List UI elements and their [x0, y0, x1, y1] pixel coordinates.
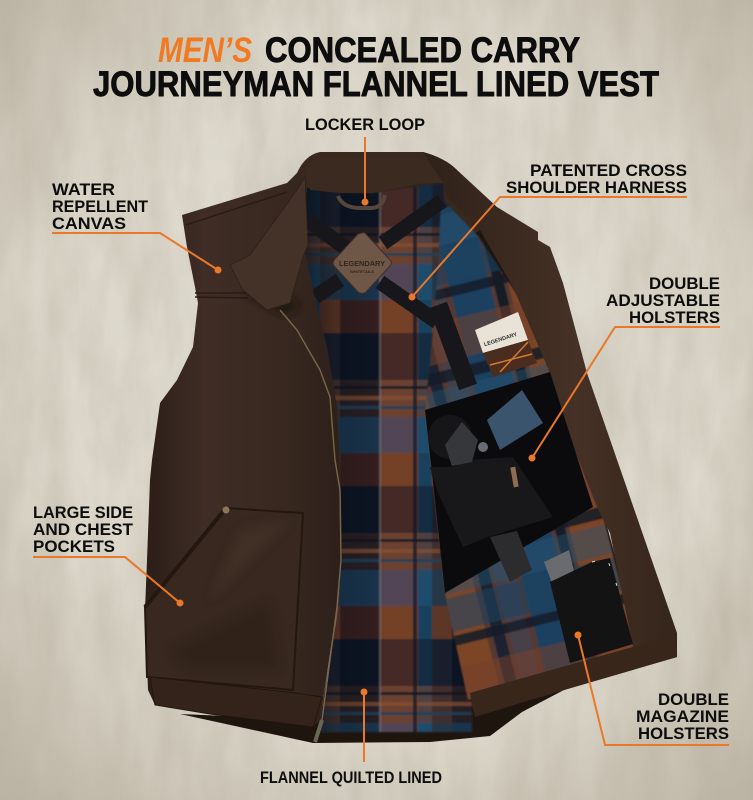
- callout: large side and chest pockets: POCKETS: [33, 538, 115, 556]
- callout: water repellent canvas: REPELLENT: [52, 198, 148, 216]
- callout: double adjustable holsters: HOLSTERS: [629, 309, 720, 327]
- callout: patented cross shoulder harness: [408, 162, 687, 300]
- callout: double magazine holsters: HOLSTERS: [638, 725, 729, 743]
- vest: pistol slide: [487, 390, 543, 450]
- callout: double adjustable holsters: DOUBLE: [649, 275, 720, 293]
- callout: water repellent canvas: WATER: [52, 181, 115, 199]
- callout: locker loop: LOCKER LOOP: [305, 116, 425, 134]
- vest: large side pocket: [145, 506, 303, 690]
- title: CONCEALED CARRY: [265, 31, 580, 70]
- vest: cross shoulder harness: [307, 201, 468, 387]
- callout: flannel quilted lined: [260, 688, 442, 787]
- callout: large side and chest pockets: AND CHEST: [33, 521, 133, 539]
- title: JOURNEYMAN FLANNEL LINED VEST: [93, 65, 659, 104]
- vest: magazine holster: [544, 550, 633, 663]
- title: [93, 31, 659, 104]
- vest: holster pouch: [428, 415, 553, 547]
- callout: flannel quilted lined: FLANNEL QUILTED LINED: [260, 769, 442, 787]
- vest: lapel shadow: [245, 288, 300, 315]
- callout: double adjustable holsters: ADJUSTABLE: [606, 292, 720, 310]
- callout: locker loop: [305, 116, 425, 206]
- vest: leather diamond patch: LEGENDARY: [339, 261, 385, 268]
- vest: collar left lapel: [230, 177, 308, 310]
- callout: water repellent canvas: [52, 181, 222, 274]
- vest: white brand label: LEGENDARY: [483, 332, 518, 348]
- vest illustration: [145, 152, 677, 743]
- vest: right flannel panel: [425, 198, 638, 700]
- vest: right front facing: [423, 152, 677, 717]
- vest: inner collar band: [305, 157, 443, 193]
- vest: shoulder yoke seam: [186, 192, 287, 298]
- callout: large side and chest pockets: [33, 504, 184, 606]
- vest: bottom hem strip: [470, 633, 677, 717]
- callout: double magazine holsters: MAGAZINE: [636, 708, 729, 726]
- title: MEN’S: [158, 31, 252, 70]
- vest: zipper pull: [315, 720, 322, 742]
- callout: double magazine holsters: [574, 632, 729, 745]
- callout: large side and chest pockets: LARGE SIDE: [33, 504, 133, 522]
- vest: back yoke and inner collar: [297, 152, 480, 260]
- callout: double adjustable holsters: [528, 275, 720, 462]
- vest: leather diamond patch: WHITETAILS: [350, 269, 374, 274]
- callout: patented cross shoulder harness: PATENTED CROSS: [530, 162, 687, 180]
- vest: black holster panel: [425, 372, 593, 593]
- vest: flannel shading: [301, 183, 472, 732]
- callout: patented cross shoulder harness: SHOULDER HARNESS: [506, 179, 687, 197]
- callout: water repellent canvas: CANVAS: [52, 215, 126, 233]
- vest: zipper: [280, 310, 341, 720]
- vest: locker loop: [338, 195, 385, 208]
- vest: lower hem band: [150, 677, 322, 727]
- vest: leather diamond patch: [333, 233, 392, 294]
- callout: double magazine holsters: DOUBLE: [658, 691, 729, 709]
- vest: left front panel: [145, 170, 342, 727]
- vest: dark underlay and back hem: [180, 180, 640, 743]
- vest: centre flannel lining: [301, 183, 472, 732]
- vest: white brand label: [475, 312, 537, 377]
- vest: pistol barrel: [490, 531, 532, 582]
